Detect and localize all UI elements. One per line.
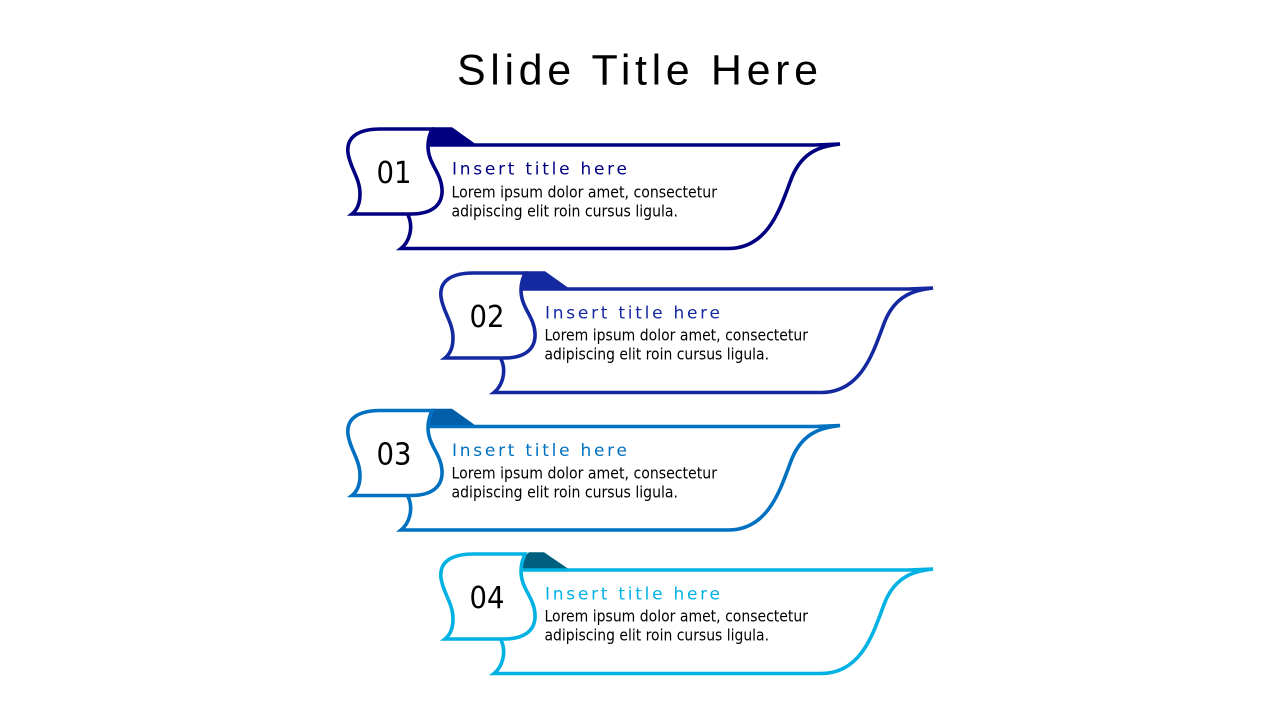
heading: item 02: Insert title here <box>545 304 720 324</box>
panel: item 01 <box>348 127 840 248</box>
text: item 02: Lorem ipsum dolor amet, consectetur <box>544 326 808 344</box>
tab shape: item 03 <box>348 410 442 496</box>
heading: item 04: Insert title here <box>545 584 720 604</box>
tab shape: item 04 <box>441 554 535 639</box>
number: 01: 01 <box>376 156 412 191</box>
panel: item 03 <box>348 409 840 530</box>
body shape: item 04 <box>494 569 933 674</box>
text: item 01: adipiscing elit roin cursus ligula. <box>452 202 678 220</box>
text: item 04: adipiscing elit roin cursus ligula. <box>544 626 769 644</box>
text: item 03 <box>452 464 717 502</box>
heading: item 01: Insert title here <box>452 160 627 180</box>
text: item 03: Lorem ipsum dolor amet, consectetur <box>452 464 717 482</box>
fold: item 04 <box>520 552 570 570</box>
body shape: item 02 <box>494 288 933 392</box>
tab shape: item 02 <box>441 273 535 358</box>
number: 02: 02 <box>470 300 504 335</box>
fold: item 03 <box>427 409 477 426</box>
text: item 04 <box>544 606 808 644</box>
heading: item 03: Insert title here <box>452 441 627 461</box>
fold: item 02 <box>520 271 570 289</box>
text: item 04: Lorem ipsum dolor amet, consectetur <box>544 606 808 626</box>
tab shape: item 01 <box>348 129 442 214</box>
text: item 02: adipiscing elit roin cursus ligula. <box>544 344 769 364</box>
text: item 01: Lorem ipsum dolor amet, consectetur <box>452 182 717 202</box>
body shape: item 03 <box>401 426 840 530</box>
text: item 02 <box>544 326 808 364</box>
text: item 01 <box>452 182 717 220</box>
number: 03: 03 <box>376 438 412 472</box>
panel: item 04 <box>441 552 933 674</box>
title: Slide Title Here <box>457 46 818 94</box>
panel: item 02 <box>441 271 933 392</box>
text: item 03: adipiscing elit roin cursus ligula. <box>452 482 678 502</box>
fold: item 01 <box>427 127 477 145</box>
body shape: item 01 <box>401 144 840 248</box>
number: 04: 04 <box>470 581 504 616</box>
